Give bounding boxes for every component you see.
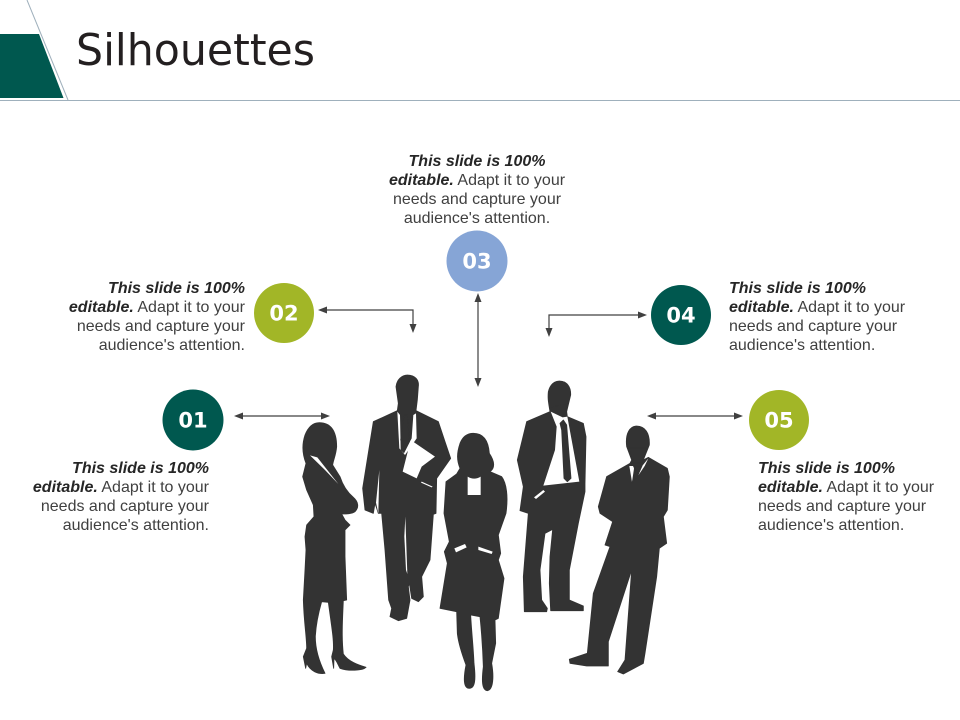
text block 04 bbox=[729, 280, 906, 354]
text block 04: audience's attention. bbox=[729, 337, 875, 354]
text block 05: needs and capture your bbox=[758, 498, 927, 515]
badge 04: 04 bbox=[666, 304, 696, 328]
arrow 01 bbox=[234, 412, 330, 420]
text block 01: audience's attention. bbox=[63, 517, 209, 534]
badge 03: 03 bbox=[462, 250, 492, 274]
text block 04: This slide is 100% bbox=[729, 280, 866, 297]
text block 01: needs and capture your bbox=[41, 498, 210, 515]
arrow 03 bbox=[474, 293, 482, 387]
silhouette: man carrying folder bbox=[363, 375, 451, 621]
badge 01: 01 bbox=[178, 408, 208, 432]
silhouette: man with crossed arms bbox=[569, 426, 669, 674]
text block 02: audience's attention. bbox=[99, 337, 245, 354]
text block 05: audience's attention. bbox=[758, 517, 904, 534]
silhouette: man with hands in pockets bbox=[517, 381, 586, 612]
text block 01 bbox=[33, 460, 210, 534]
silhouette: woman in centre bbox=[440, 433, 507, 691]
badge 05 bbox=[749, 390, 809, 450]
text block 05: This slide is 100% bbox=[758, 460, 895, 477]
text block 01: This slide is 100% bbox=[72, 460, 209, 477]
silhouette: woman with folded arms bbox=[303, 423, 366, 674]
arrow 04 bbox=[546, 312, 647, 337]
text block 02: needs and capture your bbox=[77, 318, 246, 335]
header decoration: teal tab bbox=[0, 0, 960, 100]
text block 03: audience's attention. bbox=[404, 210, 550, 227]
text block 05: editable. Adapt it to your bbox=[758, 479, 935, 496]
badge 02 bbox=[254, 283, 314, 343]
text block 02: This slide is 100% bbox=[108, 280, 245, 297]
text block 02: editable. Adapt it to your bbox=[69, 299, 246, 316]
title: Silhouettes bbox=[76, 25, 315, 76]
badge 04 bbox=[651, 285, 711, 345]
badge 05: 05 bbox=[764, 408, 794, 432]
text block 05 bbox=[758, 460, 935, 534]
text block 02 bbox=[69, 280, 246, 354]
arrow 05 bbox=[647, 412, 743, 420]
text block 03: editable. Adapt it to your bbox=[389, 172, 566, 189]
text block 03: needs and capture your bbox=[393, 191, 562, 208]
badge 03 bbox=[446, 230, 508, 292]
badge 02: 02 bbox=[269, 302, 299, 326]
text block 01: editable. Adapt it to your bbox=[33, 479, 210, 496]
text block 03: This slide is 100% bbox=[409, 153, 545, 170]
arrow 02 bbox=[318, 306, 416, 333]
silhouette group: five business people bbox=[303, 375, 669, 691]
badge 01 bbox=[162, 390, 224, 450]
text block 03 bbox=[389, 153, 566, 227]
text block 04: editable. Adapt it to your bbox=[729, 299, 906, 316]
text block 04: needs and capture your bbox=[729, 318, 898, 335]
